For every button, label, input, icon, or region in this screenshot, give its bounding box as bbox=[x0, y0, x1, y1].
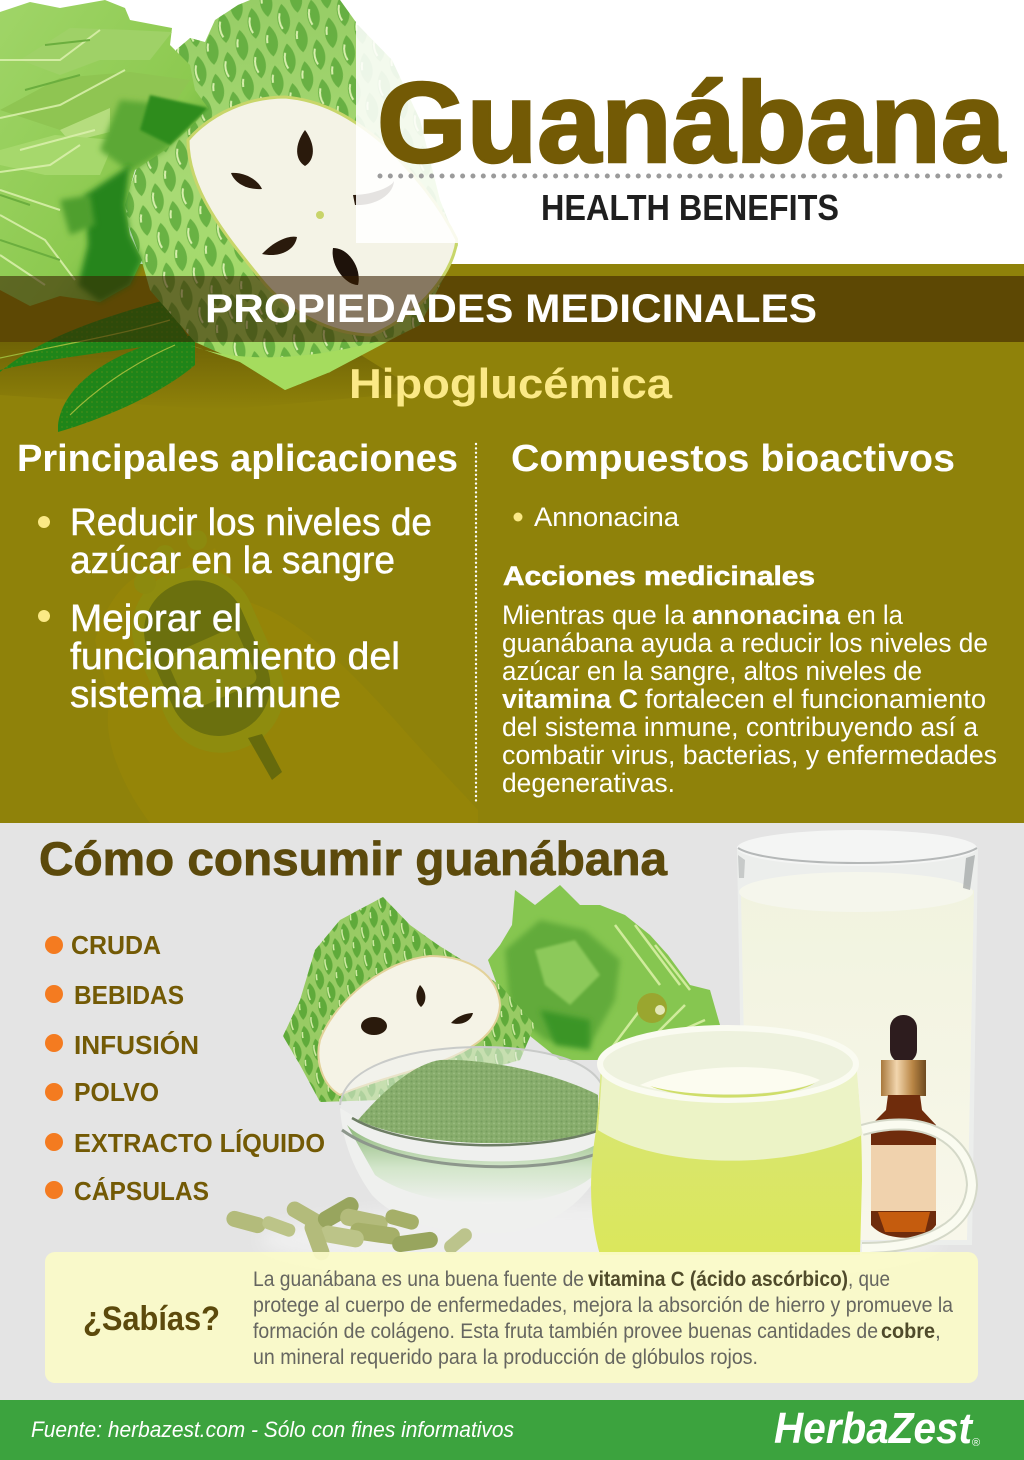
text block: medicinal actions: guanábana ayuda a reducir los niveles de bbox=[502, 628, 988, 658]
band: section heading: PROPIEDADES MEDICINALES bbox=[205, 287, 817, 331]
callout heading: ¿Sabías? bbox=[83, 1300, 220, 1338]
list item: infusion: INFUSIÓN bbox=[74, 1030, 199, 1060]
callout text: La guanábana es una buena fuente de bbox=[253, 1268, 584, 1291]
text block: medicinal actions: annonacina bbox=[692, 600, 841, 630]
dotted title divider bbox=[380, 174, 1002, 178]
vertical dotted divider bbox=[475, 444, 477, 801]
cut face of the fruit bbox=[188, 97, 457, 335]
bullet: blood sugar: azúcar en la sangre bbox=[70, 540, 395, 582]
registered mark: ® bbox=[972, 1437, 980, 1449]
text block: medicinal actions: azúcar en la sangre, altos niveles de bbox=[502, 656, 922, 686]
footer bbox=[0, 1400, 1024, 1460]
illustration: hand holding glucose meter bbox=[95, 530, 478, 823]
callout text: , bbox=[935, 1320, 941, 1343]
list item: liquid extract: EXTRACTO LÍQUIDO bbox=[74, 1128, 325, 1158]
leafy whole fruit bbox=[0, 0, 208, 306]
callout text: cobre bbox=[881, 1320, 935, 1343]
bullet: blood sugar: Reducir los niveles de bbox=[70, 502, 432, 544]
callout text: un mineral requerido para la producción de glóbulos rojos. bbox=[253, 1346, 758, 1369]
soft shadow under fruit bbox=[0, 342, 420, 410]
callout text: protege al cuerpo de enfermedades, mejora la absorción de hierro y promueve la bbox=[253, 1294, 953, 1317]
illustration: guanábana fruits and leaves bbox=[0, 0, 458, 432]
bullet: annonacin: Annonacina bbox=[534, 502, 680, 532]
panel: how to consume background bbox=[0, 823, 1024, 1400]
logo: HerbaZest bbox=[774, 1404, 974, 1453]
cut fruit, left bbox=[283, 897, 535, 1102]
list item: capsules: CÁPSULAS bbox=[74, 1176, 209, 1206]
bumpy fruit body bbox=[122, 0, 458, 390]
panel: medicinal properties background bbox=[0, 264, 1024, 823]
source note: Fuente: herbazest.com - Sólo con fines informativos bbox=[31, 1417, 514, 1442]
white veil over the fruit behind the title bbox=[356, 25, 1024, 243]
list: forms of consumption bbox=[45, 930, 325, 1206]
callout text: formación de colágeno. Esta fruta también provee buenas cantidades de bbox=[253, 1320, 878, 1343]
heading: property name: Hipoglucémica bbox=[349, 360, 673, 407]
text block: medicinal actions: degenerativas. bbox=[502, 768, 675, 798]
heading: medicinal actions: Acciones medicinales bbox=[503, 561, 815, 591]
dropper bottle bbox=[871, 1015, 936, 1238]
leaves bbox=[0, 300, 195, 432]
callout text bbox=[253, 1268, 953, 1369]
heading: main applications: Principales aplicaciones bbox=[17, 438, 458, 480]
text block: medicinal actions: Mientras que la bbox=[502, 600, 686, 630]
subtitle: HEALTH BENEFITS bbox=[541, 187, 839, 228]
bullet: blood sugar bbox=[38, 502, 432, 582]
callout text: , que bbox=[848, 1268, 890, 1291]
title: Guanábana bbox=[377, 60, 1007, 187]
whole fruit, right bbox=[488, 885, 720, 1060]
bullet: immune system: Mejorar el bbox=[70, 598, 242, 640]
text block: medicinal actions bbox=[502, 600, 997, 798]
list item: powder: POLVO bbox=[74, 1077, 159, 1107]
glass bowl with green powder bbox=[340, 1047, 605, 1233]
panel: main applications bbox=[17, 438, 458, 716]
list item: drinks: BEBIDAS bbox=[74, 980, 184, 1010]
heading: how to consume: Cómo consumir guanábana bbox=[39, 832, 668, 885]
band: section heading bbox=[0, 276, 1024, 342]
text block: medicinal actions: vitamina C bbox=[502, 684, 638, 714]
list item: raw: CRUDA bbox=[71, 930, 161, 960]
bullet: immune system: funcionamiento del bbox=[70, 636, 400, 678]
glass of juice bbox=[737, 830, 978, 1245]
mug of green tea bbox=[591, 1028, 972, 1255]
bullet: immune system: sistema inmune bbox=[70, 674, 341, 716]
text block: medicinal actions: en la bbox=[847, 600, 904, 630]
table glow bbox=[260, 1204, 940, 1276]
heading: bioactive compounds: Compuestos bioactivos bbox=[511, 438, 955, 480]
panel: bioactive compounds bbox=[502, 438, 997, 798]
illustration: products on table bbox=[225, 830, 978, 1276]
capsules bbox=[225, 1194, 475, 1262]
text block: medicinal actions: fortalecen el funcionamiento bbox=[645, 684, 986, 714]
text block: medicinal actions: del sistema inmune, contribuyendo así a bbox=[502, 712, 979, 742]
bullet: immune system bbox=[38, 598, 400, 716]
callout: did you know bbox=[45, 1252, 978, 1383]
callout text: vitamina C (ácido ascórbico) bbox=[588, 1268, 848, 1291]
text block: medicinal actions: combatir virus, bacterias, y enfermedades bbox=[502, 740, 997, 770]
